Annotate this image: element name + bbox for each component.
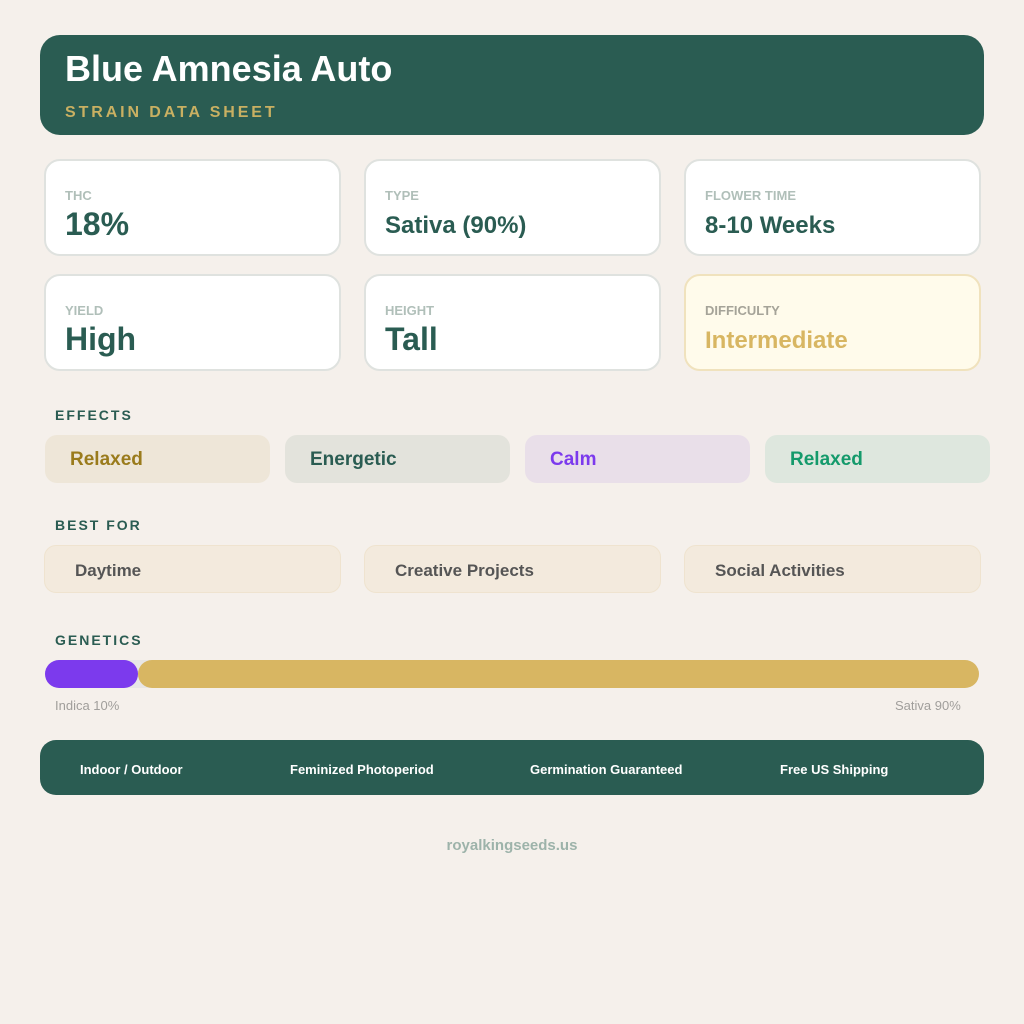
genetics bar xyxy=(45,660,979,688)
label: flower time: FLOWER TIME xyxy=(705,188,796,203)
chip text: Energetic xyxy=(310,449,397,470)
value: Sativa: Sativa (90%) xyxy=(385,212,526,239)
heading: effects: EFFECTS xyxy=(55,407,133,423)
sativa segment xyxy=(138,660,979,688)
footer item: shipping: Free US Shipping xyxy=(780,762,888,777)
genetics label: sativa: Sativa 90% xyxy=(895,698,961,713)
stat card: THC xyxy=(44,159,341,256)
value: high: High xyxy=(65,321,136,357)
effect chip: calm xyxy=(525,435,750,483)
chip text: Creative Projects xyxy=(395,561,534,580)
label: yield: YIELD xyxy=(65,303,103,318)
footer item: germination: Germination Guaranteed xyxy=(530,762,682,777)
header banner xyxy=(40,35,984,135)
genetics label: indica: Indica 10% xyxy=(55,698,119,713)
best-for chip: creative projects xyxy=(364,545,661,593)
chip text: Social Activities xyxy=(715,561,845,580)
indica segment xyxy=(45,660,138,688)
stat card: flower time xyxy=(684,159,981,256)
footer item: feminized: Feminized Photoperiod xyxy=(290,762,434,777)
footer item: indoor/outdoor: Indoor / Outdoor xyxy=(80,762,183,777)
label: height: HEIGHT xyxy=(385,303,434,318)
footer banner xyxy=(40,740,984,795)
value: tall: Tall xyxy=(385,321,438,357)
best-for chip: daytime xyxy=(44,545,341,593)
value: 8-10 weeks: 8-10 Weeks xyxy=(705,212,835,239)
effect chip: relaxed xyxy=(45,435,270,483)
chip text: Relaxed xyxy=(790,449,863,470)
title: Blue Amnesia Auto xyxy=(65,48,392,89)
heading: best for: BEST FOR xyxy=(55,517,142,533)
effect chip: energetic xyxy=(285,435,510,483)
stat card: type xyxy=(364,159,661,256)
best-for chip: social activities xyxy=(684,545,981,593)
value: 18%: 18% xyxy=(65,206,129,242)
chip text: Calm xyxy=(550,449,596,470)
stat card: height xyxy=(364,274,661,371)
label: type: TYPE xyxy=(385,188,419,203)
value: intermediate: Intermediate xyxy=(705,327,848,354)
label: difficulty: DIFFICULTY xyxy=(705,303,780,318)
heading: genetics: GENETICS xyxy=(55,632,143,648)
stat card: yield xyxy=(44,274,341,371)
chip text: Daytime xyxy=(75,561,141,580)
website credit: royalkingseeds.us xyxy=(447,837,577,854)
effect chip: relaxed green xyxy=(765,435,990,483)
stat card: difficulty xyxy=(684,274,981,371)
chip text: Relaxed xyxy=(70,449,143,470)
subtitle: STRAIN DATA SHEET xyxy=(65,104,278,121)
label: THC: THC xyxy=(65,188,92,203)
